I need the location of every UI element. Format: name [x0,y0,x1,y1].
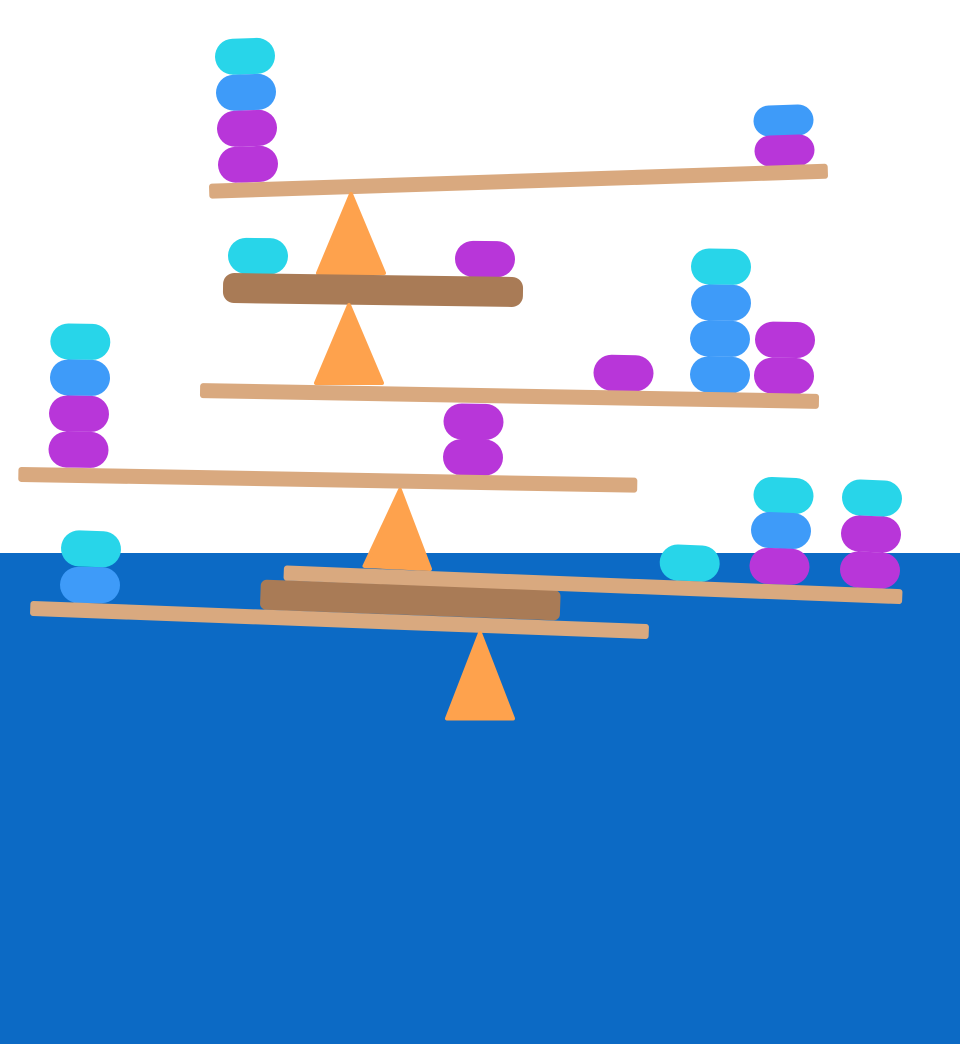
pill stack: two purple [754,321,815,394]
pill: single purple [593,354,654,392]
plank: third [18,467,637,493]
group: top seesaw [209,37,828,199]
water background [0,553,960,1044]
fulcrum: second triangle [316,305,382,383]
pill stack: top right [753,104,815,167]
pill stack: top left [214,37,279,183]
group: second seesaw [200,248,819,409]
pill: single cyan [659,544,720,582]
group: bottom seesaw [30,530,649,639]
plank: fourth [283,565,903,604]
group: fourth seesaw [283,476,903,604]
group: third seesaw [18,323,637,493]
fulcrum: top triangle [318,194,384,273]
pill: cyan on brown block [228,238,288,274]
brown block: lower [260,580,561,620]
pill: purple on brown block [455,241,515,277]
pill stack: middle purple [443,403,504,476]
pill stack: four tall [690,248,751,393]
plank: top [209,164,828,199]
fulcrum: third triangle [364,490,430,569]
pill stack: three middle [749,476,814,585]
pill stack: left [48,323,111,468]
plank: bottom [30,601,649,639]
plank: second [200,383,819,409]
pill stack: three right [839,479,903,589]
group: brown block one [223,238,523,307]
brown block: upper [223,273,523,307]
pill stack: bottom left [60,530,122,603]
fulcrum: bottom triangle [447,633,513,718]
